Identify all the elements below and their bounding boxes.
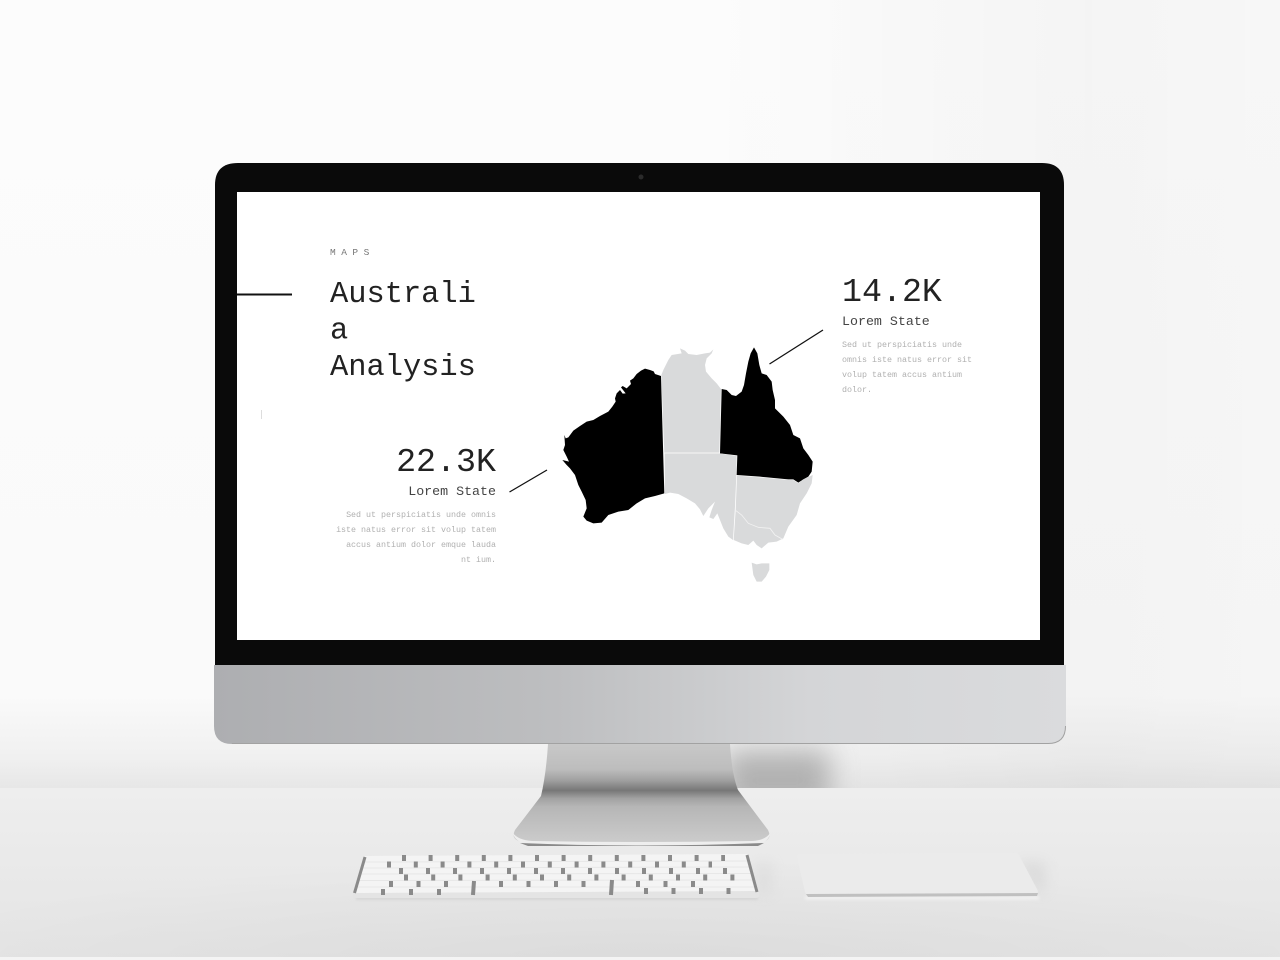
title: Australi [330,278,476,312]
New South Wales and Victoria [734,475,813,548]
Western Australia [562,369,664,523]
small tick mark [261,410,262,419]
monitor [214,163,1066,744]
trackpad edge [806,893,1038,897]
value: 22.3K [396,443,496,481]
chin lower edge [232,726,1066,744]
state name: Lorem State [842,314,930,329]
key gaps [354,855,757,895]
description: dolor. [842,385,872,395]
connector line: right [770,330,823,364]
keyboard right shadow [756,862,772,894]
Queensland [720,347,813,483]
description: accus antium dolor emque lauda [346,540,496,550]
accent line [237,294,292,296]
description: volup tatem accus antium [842,370,962,380]
stat block: left [336,443,496,565]
monitor bezel [215,163,1064,665]
stat block: right [842,273,972,395]
connector line: left [510,470,547,492]
stand front rim [513,833,770,846]
section label: MAPS [330,247,375,258]
value: 14.2K [842,273,942,311]
Tasmania [752,563,769,582]
map of Australia [562,347,813,582]
key row lines [356,861,757,887]
keyboard [353,854,772,900]
slide screen [237,192,1040,640]
state border [736,511,783,539]
description: omnis iste natus error sit [842,355,972,365]
keyboard body [353,854,759,895]
desk surface [0,788,1280,960]
title: a [330,314,348,348]
description: nt ium. [461,555,496,565]
trackpad surface [797,853,1038,895]
trackpad [797,853,1045,900]
description: Sed ut perspiciatis unde [842,340,962,350]
South Australia [665,453,737,540]
wall shadow behind stand [725,750,830,810]
stand body [514,744,769,844]
keyboard edge [353,891,759,898]
title: Analysis [330,351,476,385]
monitor chin [214,665,1066,744]
webcam [638,174,644,180]
monitor stand [513,744,770,846]
Northern Territory [661,348,721,453]
description: iste natus error sit volup tatem [336,525,496,535]
trackpad right shadow [1016,862,1045,892]
keyboard shadow [356,895,758,900]
state name: Lorem State [408,484,496,499]
description: Sed ut perspiciatis unde omnis [346,510,496,520]
trackpad reflection [805,896,1039,900]
stand under edge [520,843,764,846]
